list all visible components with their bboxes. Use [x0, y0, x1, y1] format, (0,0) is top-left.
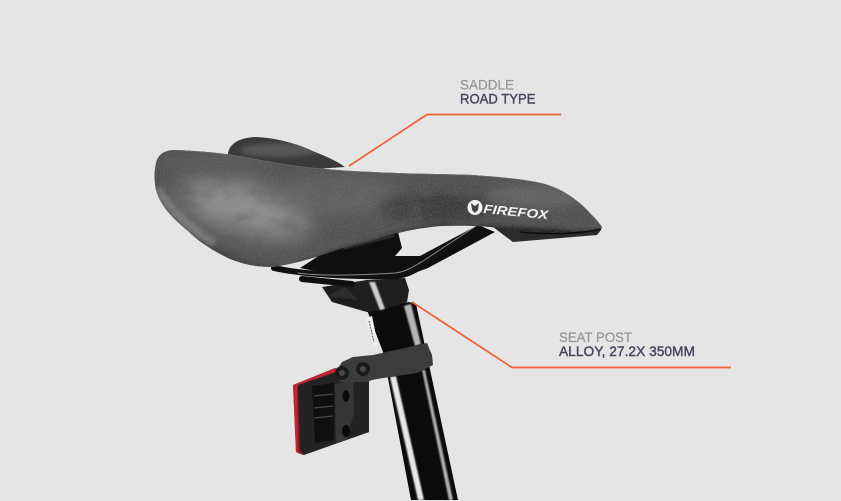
leader line	[349, 114, 561, 166]
seat post	[366, 302, 458, 500]
value: ROAD TYPE: ROAD TYPE	[460, 90, 536, 106]
leader line	[412, 302, 731, 368]
strap	[337, 343, 433, 382]
reflector	[293, 368, 369, 455]
logo: FIREFOX: FIREFOX	[483, 202, 550, 222]
callout: saddle	[349, 76, 561, 166]
callout: seat post	[412, 302, 731, 368]
bolts	[335, 366, 349, 380]
label: SEAT POST: SEAT POST	[559, 329, 632, 345]
seat clamp	[322, 278, 409, 312]
saddle back	[228, 137, 345, 170]
label: SADDLE: SADDLE	[460, 76, 514, 92]
value: ALLOY, 27.2X 350MM: ALLOY, 27.2X 350MM	[559, 343, 695, 359]
saddle	[154, 150, 602, 267]
product diagram: saddle and seat post	[154, 80, 731, 500]
saddle nose underside	[493, 227, 601, 242]
logo icon	[468, 200, 482, 215]
post label sticker	[366, 316, 378, 347]
logo: FIREFOX	[468, 200, 550, 222]
strap and reflector	[293, 343, 433, 455]
saddle rails	[274, 225, 495, 284]
